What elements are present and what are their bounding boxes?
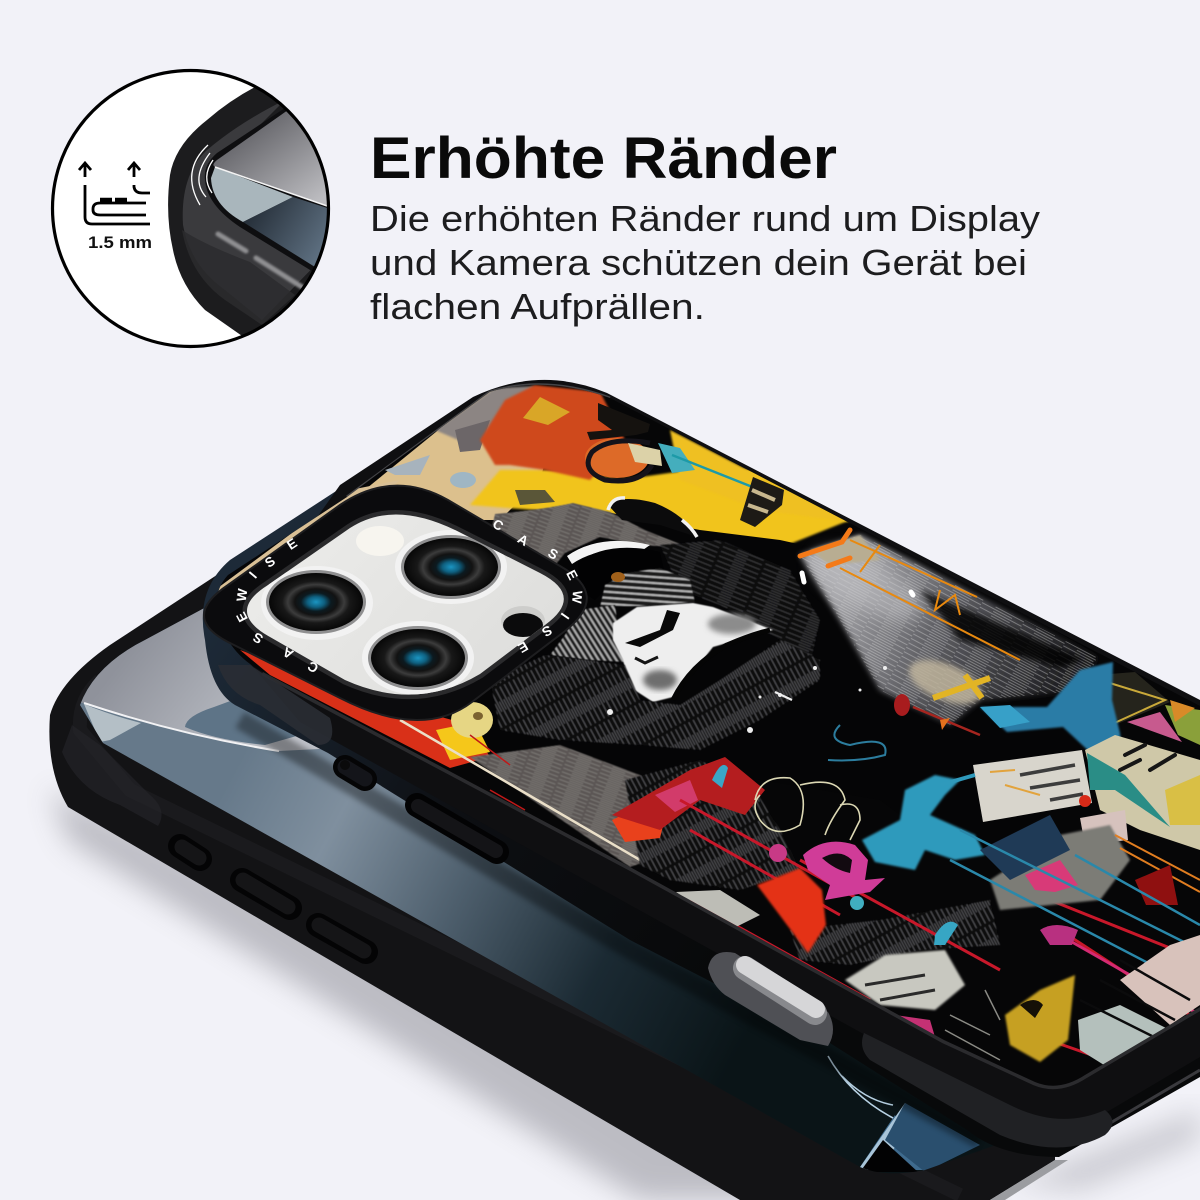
gorilla black body [607, 512, 796, 554]
wallpaper light band [860, 1103, 906, 1170]
second nostril mark [635, 657, 658, 663]
back phone volume up button [242, 880, 290, 908]
impact arcs [192, 145, 213, 205]
back phone mute button [180, 846, 200, 859]
beige poster top left [369, 390, 544, 520]
fur patch strokes [865, 975, 935, 1000]
pink splash [1025, 860, 1078, 892]
dark red splash [1135, 865, 1178, 905]
camera plate components [261, 526, 545, 695]
eye socket black [590, 548, 644, 556]
pale pink paint [1080, 810, 1128, 845]
yellow face [1005, 975, 1075, 1062]
teal paint [658, 443, 695, 473]
grey paint midsection [990, 825, 1130, 910]
circle background [52, 70, 328, 346]
back phone [49, 576, 1068, 1200]
front phone side wall [203, 482, 1200, 1157]
inset case [168, 86, 340, 340]
cream collage [628, 443, 662, 466]
black banner [740, 477, 784, 527]
gorilla muzzle [613, 603, 773, 702]
newspaper note [973, 750, 1092, 822]
wallpaper blue glow [860, 1115, 922, 1170]
back phone case [49, 478, 1055, 1200]
front phone side button [417, 805, 497, 852]
arrow left [79, 163, 91, 177]
inset bumper highlight [218, 234, 302, 287]
grey fur centre bottom [790, 900, 1000, 965]
dark flecks bottom [945, 990, 1000, 1060]
brand ring text: C [490, 516, 506, 534]
black ring [588, 441, 652, 481]
inset screen dark panel [243, 197, 340, 270]
camera inner bevel [247, 514, 564, 695]
wallpaper streaks [828, 1056, 893, 1118]
yellow in splash [523, 397, 570, 425]
tan patch on back [810, 535, 880, 565]
light blue paint [980, 705, 1030, 728]
teal drop [934, 922, 958, 945]
back fur swath [800, 535, 1097, 725]
brand ring text: E [515, 638, 531, 656]
white brow stripe [567, 541, 650, 564]
orange inside ring [585, 438, 649, 478]
collage red lines [470, 735, 525, 810]
right yellow blob [1165, 775, 1200, 825]
arrow right [128, 163, 140, 177]
back dark band [920, 590, 1085, 668]
yellow collage [436, 722, 490, 760]
blue lettering [862, 775, 985, 870]
carbon bumper patch right [862, 1033, 1112, 1148]
pink bottom shape [895, 1015, 935, 1037]
inset wallpaper line [215, 167, 330, 207]
magenta drip [1072, 942, 1200, 1015]
orange brush strokes [800, 530, 850, 566]
face dark details [1020, 1000, 1043, 1018]
light blue wedge [84, 704, 141, 742]
body line 1: Die erhöhten Ränder rund um Display [370, 198, 1040, 239]
back phone shadow [50, 790, 1000, 1200]
back phone volume down button [318, 925, 366, 952]
orange long lines [840, 540, 1020, 660]
chest grey fur [470, 745, 680, 867]
brand ring text: W [569, 590, 585, 604]
fur under chin [490, 640, 820, 750]
silver side port [708, 952, 833, 1046]
red drop [894, 694, 910, 716]
camera glossy outer bumper [204, 486, 587, 720]
circle outline [52, 70, 328, 346]
brand ring text: E [284, 535, 300, 553]
gorilla mouth [673, 630, 770, 700]
body text [370, 198, 1040, 327]
brand ring text: I [558, 610, 572, 622]
body line 3: flachen Aufprällen. [370, 286, 705, 327]
teal dot [850, 896, 864, 910]
muzzle grey spot [708, 614, 756, 634]
black stripes [1080, 960, 1190, 1045]
front phone camera switch [340, 760, 365, 779]
brand ring text: E [233, 609, 251, 625]
upper lip [134, 185, 150, 193]
orange drip lines [1115, 835, 1200, 892]
newspaper scrap [676, 890, 760, 930]
gorilla crown fur [492, 502, 680, 564]
outer case line [85, 185, 150, 224]
magenta drop [1040, 925, 1078, 945]
banner lettering [748, 490, 775, 512]
dark counter of letter [822, 853, 852, 873]
back phone screen [80, 608, 993, 1173]
inset detail circle [52, 70, 340, 346]
eye wrinkles [600, 568, 695, 607]
yellow upper right [670, 430, 850, 522]
back phone rim highlight [80, 680, 960, 1195]
red line [913, 707, 980, 735]
inset grey bumper band [183, 100, 330, 320]
blue letter stroke [940, 775, 975, 785]
cream drips [1078, 1005, 1170, 1075]
black graffiti letters [587, 403, 650, 440]
inset phone corner [168, 86, 340, 340]
wallpaper white curve [84, 703, 279, 751]
microphone hole [501, 606, 545, 637]
inset screen top [213, 110, 340, 207]
red patch [612, 757, 765, 830]
artwork base [200, 370, 1200, 1100]
wallpaper blue panel [885, 1103, 980, 1172]
back fur strands [800, 535, 1097, 725]
brand ring text: S [262, 553, 278, 571]
blue scribble [828, 725, 886, 760]
front phone corner shadow [1010, 1110, 1200, 1190]
inset screen light wedge [211, 167, 293, 222]
lens top [395, 530, 507, 604]
body line 2: und Kamera schützen dein Gerät bei [370, 242, 1027, 283]
right black brush marks [1120, 745, 1195, 795]
measurement label: 1.5 mm [88, 234, 152, 252]
right cream collage [1085, 735, 1200, 850]
beige left strip [218, 480, 399, 591]
flower dark center [473, 712, 483, 720]
dark collage top right [1097, 672, 1170, 727]
lens left [261, 566, 373, 640]
rim highlight bottom corner [1000, 1070, 1200, 1139]
orange accent [940, 718, 950, 730]
screen gradient [80, 608, 993, 1173]
flash [356, 526, 404, 556]
nostril [625, 610, 680, 647]
rear artwork [200, 370, 1200, 1100]
brand ring text: C [305, 658, 321, 676]
icon: raised edge diagram [79, 163, 150, 224]
brand ring text: S [250, 629, 266, 647]
left blue wash [385, 455, 430, 475]
front phone shadow on back screen [240, 720, 980, 1140]
blue paint [980, 662, 1122, 757]
inset lower bumper shading [182, 230, 295, 325]
phone outline [93, 203, 146, 215]
orange collage [1170, 700, 1195, 722]
orange blobs [612, 812, 665, 842]
white fur specks [802, 573, 913, 595]
navy blob [980, 815, 1070, 880]
grey paint patch [455, 420, 490, 452]
cheek wrinkles [550, 605, 625, 662]
pink patch [655, 780, 698, 812]
back fur tan wash [903, 651, 987, 713]
camera island [204, 486, 587, 720]
red wedge [757, 868, 826, 953]
lens bottom [362, 621, 474, 695]
chin grey [643, 670, 677, 690]
note red marks [990, 770, 1040, 795]
brand ring text: I [246, 569, 260, 581]
brand ring text: A [515, 531, 531, 549]
pink collage [1127, 712, 1182, 742]
gorilla head fur right [660, 540, 820, 665]
green collage [1165, 705, 1200, 745]
yellow cross [933, 675, 990, 698]
back fur bright wash [804, 536, 932, 634]
splatter dots [607, 666, 887, 733]
brand ring text: S [539, 622, 555, 640]
pink letter P [803, 842, 885, 900]
red yellow collage under camera [240, 650, 490, 768]
white fur patch [845, 950, 965, 1010]
front phone [200, 370, 1200, 1157]
collage cream line [400, 720, 640, 860]
pink white stripes [1120, 935, 1200, 1025]
blue sketch [450, 472, 476, 488]
upper grey wedge [81, 608, 320, 751]
white scribble [755, 778, 860, 840]
carbon bumper patch left [218, 665, 332, 745]
gorilla eye [611, 572, 625, 582]
brand ring text: S [545, 545, 561, 563]
brand ring text [233, 516, 585, 676]
dark streaked fur lower [625, 760, 800, 890]
yellow paint band [470, 470, 850, 552]
camera plate [247, 514, 564, 695]
grey lilac top paint [435, 386, 535, 445]
splatter stroke [775, 692, 792, 700]
rim lower bevel [263, 672, 1200, 1086]
blue streak [672, 454, 751, 488]
blue notch [185, 701, 296, 745]
teal drop [712, 765, 728, 788]
blue drip lines [950, 830, 1200, 990]
gorilla ear [608, 498, 697, 537]
dark smudges [515, 490, 555, 505]
pale flower [451, 702, 493, 738]
camera bumps [100, 198, 127, 202]
brand ring text: W [234, 587, 250, 602]
yellow wires [1100, 680, 1165, 725]
heading: Erhöhte Ränder [370, 126, 837, 191]
rim inner bevel [347, 385, 610, 497]
orange red splash [480, 385, 625, 480]
pink dot [769, 844, 787, 862]
teal paint right [1087, 753, 1170, 827]
red drips [680, 800, 1200, 1065]
note scribble [1020, 765, 1083, 800]
back phone lower metal edge [990, 1160, 1068, 1200]
wallpaper black triangle [860, 1140, 918, 1172]
inset dark screen bezel [205, 106, 340, 273]
front phone rim [230, 380, 1200, 1132]
brand ring text: E [563, 567, 581, 583]
carbon bumper patch [62, 725, 162, 826]
note red dot [1079, 795, 1091, 807]
brand ring text: A [280, 644, 296, 662]
